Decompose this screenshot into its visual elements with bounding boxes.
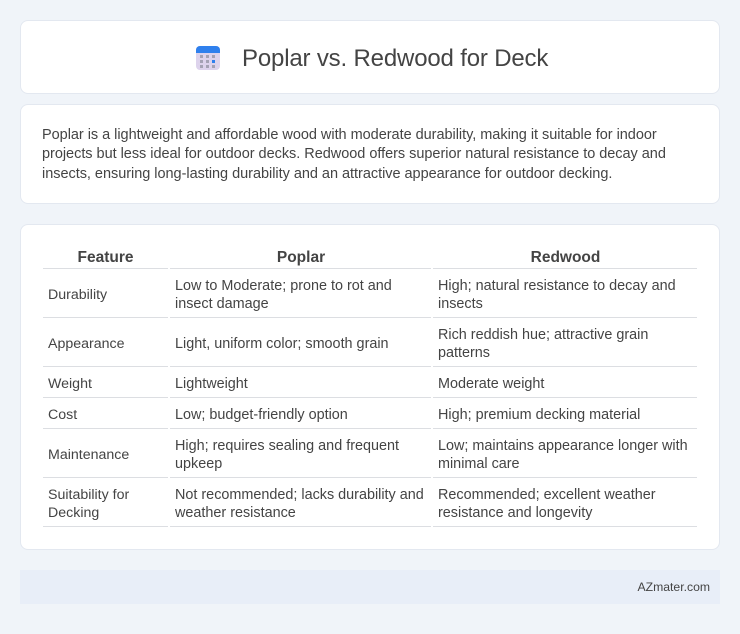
row: cost: Low; budget-friendly option <box>175 407 348 423</box>
row: weight: Lightweight <box>175 376 248 392</box>
title card <box>20 20 720 94</box>
row: appearance: Appearance <box>48 336 125 352</box>
intro text <box>42 127 666 182</box>
row: suitability: Not recommended; lacks durability and <box>175 487 424 503</box>
row: cost <box>43 407 697 429</box>
row: durability: insects <box>438 296 483 312</box>
row: maintenance: High; requires sealing and frequent <box>175 438 399 454</box>
title: Poplar vs. Redwood for Deck <box>242 45 548 72</box>
row: maintenance: upkeep <box>175 456 222 472</box>
header row: Feature <box>78 249 134 266</box>
row: suitability: weather resistance <box>175 505 296 521</box>
row: suitability: resistance and longevity <box>438 505 592 521</box>
row: maintenance: Maintenance <box>48 447 129 463</box>
row: weight <box>43 376 697 398</box>
row: cost: Cost <box>48 407 77 423</box>
row: durability: Low to Moderate; prone to rot and <box>175 278 392 294</box>
panel: comparison table <box>20 224 720 550</box>
footer bar <box>20 570 720 604</box>
row: cost: High; premium decking material <box>438 407 640 423</box>
row: weight: Moderate weight <box>438 376 544 392</box>
header row: Poplar <box>277 249 325 266</box>
row: appearance <box>43 327 697 367</box>
row: weight: Weight <box>48 376 92 392</box>
row: suitability <box>43 487 697 527</box>
row: appearance: Rich reddish hue; attractive grain <box>438 327 648 343</box>
row: suitability: Suitability for <box>48 487 129 503</box>
row: suitability: Recommended; excellent weather <box>438 487 656 503</box>
header row: Redwood <box>531 249 600 266</box>
row: maintenance: Low; maintains appearance longer with <box>438 438 688 454</box>
row: appearance: patterns <box>438 345 490 361</box>
row: durability: insect damage <box>175 296 269 312</box>
icon: calendar <box>196 46 220 70</box>
intro text: insects, ensuring long-lasting durability and an attractive appearance for outdoor decking. <box>42 166 612 182</box>
table <box>43 249 697 527</box>
footer source: AZmater.com <box>638 580 710 594</box>
row: durability: High; natural resistance to decay and <box>438 278 676 294</box>
header row <box>43 249 697 269</box>
row: suitability: Decking <box>48 505 99 521</box>
intro text: Poplar is a lightweight and affordable wood with moderate durability, making it suitable for indoor <box>42 127 657 143</box>
row: appearance: Light, uniform color; smooth grain <box>175 336 389 352</box>
row: maintenance: minimal care <box>438 456 520 472</box>
row: maintenance <box>43 438 697 478</box>
intro text: projects but less ideal for outdoor decks. Redwood offers superior natural resistance to decay and <box>42 146 666 162</box>
row: durability <box>43 278 697 318</box>
panel: intro <box>20 104 720 204</box>
row: durability: Durability <box>48 287 107 303</box>
